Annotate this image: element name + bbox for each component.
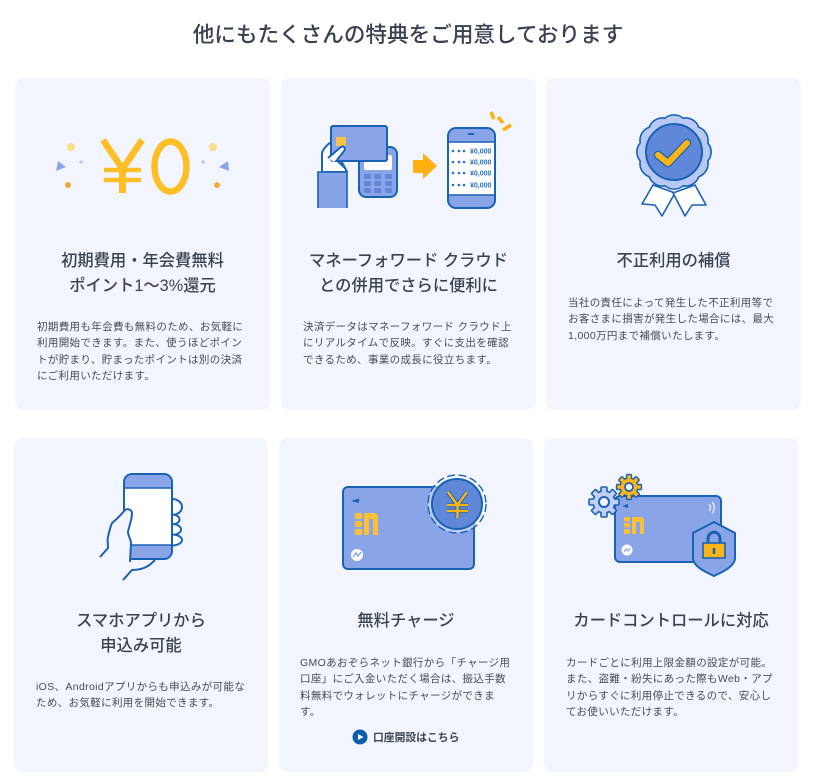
body text [566, 657, 773, 718]
body text [303, 321, 512, 366]
body text [568, 297, 774, 342]
body text: 初期費用も年会費も無料のため、お気軽に [37, 321, 243, 333]
icon: card with yen coin [342, 474, 487, 570]
icon: card payment to phone: ¥0,000 [470, 148, 492, 156]
heading: 無料チャージ [357, 612, 455, 630]
body text: GMOあおぞらネット銀行から「チャージ用 [300, 657, 510, 669]
body text: にリアルタイムで反映。すぐに支出を確認 [303, 337, 509, 349]
heading: ポイント1〜3%還元 [69, 277, 216, 295]
icon: hand holding phone [99, 473, 183, 581]
body text: 当社の責任によって発生した不正利用等で [568, 297, 773, 309]
panel: fraud compensation [546, 78, 801, 410]
panel: card control [544, 438, 798, 772]
panel: free charge [279, 438, 533, 772]
heading [309, 252, 508, 295]
heading: マネーフォワード クラウド [309, 252, 508, 270]
icon: card payment to phone: ¥0,000 [470, 160, 492, 166]
body text: iOS、Androidアプリからも申込みが可能な [36, 681, 245, 693]
icon: small gear [616, 474, 642, 500]
body text: 料無料でウォレットにチャージができま [300, 690, 495, 702]
heading [61, 252, 224, 295]
heading: との併用でさらに便利に [319, 277, 498, 295]
body text: 利用開始できます。また、使うほどポイン [37, 337, 242, 349]
heading: スマホアプリから [76, 612, 206, 630]
icon: card with gears and shield [588, 474, 736, 577]
body text: す。 [300, 706, 321, 718]
icon: card payment to phone: ¥0,000 [470, 182, 492, 190]
body text: 1,000万円まで補償いたします。 [568, 330, 725, 342]
body text: てお使いいただけます。 [566, 706, 684, 718]
icon: card payment to phone [317, 111, 512, 209]
title: 他にもたくさんの特典をご用意しております [193, 22, 623, 47]
icon: card payment to phone: ¥0,000 [470, 170, 492, 178]
icon: yen zero with confetti [56, 138, 229, 195]
heading: カードコントロールに対応 [573, 612, 769, 630]
body text [300, 657, 510, 718]
body text [37, 321, 243, 382]
body text: できるため、事業の成長に役立ちます。 [303, 354, 497, 366]
heading: 申込み可能 [100, 637, 182, 655]
heading [76, 612, 206, 655]
body text: カードごとに利用上限金額の設定が可能。 [566, 657, 772, 669]
icon: play button [352, 730, 368, 744]
body text: トが貯まり、貯まったポイントは別の決済 [37, 354, 242, 366]
link: open account [352, 730, 459, 744]
body text: 決済データはマネーフォワード クラウド上 [303, 321, 512, 333]
body text: お客さまに損害が発生した場合には、最大 [568, 313, 774, 325]
body text: また、盗難・紛失にあった際もWeb・アプ [566, 673, 773, 685]
body text [36, 681, 245, 709]
panel: Money Forward Cloud [281, 78, 536, 410]
icon: large gear [589, 487, 619, 517]
body text: ため、お気軽に利用を開始できます。 [36, 697, 219, 709]
body text: にご利用いただけます。 [37, 370, 155, 382]
body text: 口座」にご入金いただく場合は、振込手数 [300, 673, 506, 685]
heading: 初期費用・年会費無料 [61, 252, 224, 270]
link label: 口座開設はこちら [373, 732, 459, 744]
heading: 不正利用の補償 [616, 252, 730, 270]
panel: zero fees [15, 78, 270, 410]
icon: award badge [636, 114, 712, 217]
body text: リからすぐに利用停止できるので、安心し [566, 690, 771, 702]
panel: smartphone app [14, 438, 268, 772]
